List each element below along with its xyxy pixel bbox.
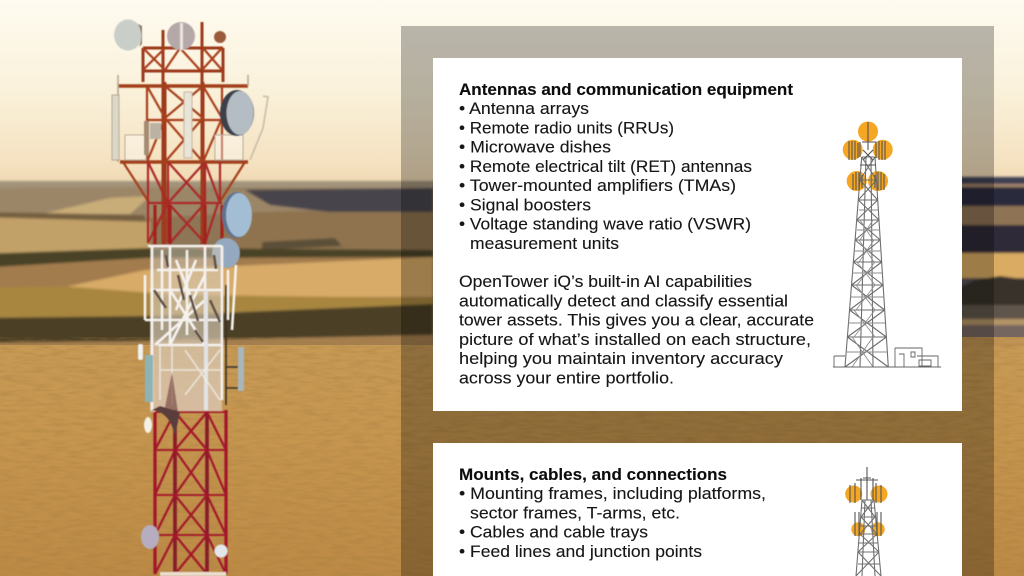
- highlight circles: [843, 122, 893, 191]
- small lower dishes: [144, 417, 152, 433]
- tower lattice: [856, 500, 881, 576]
- heading: Mounts, cables, and connections: [459, 466, 727, 484]
- sky: [0, 0, 1024, 185]
- card background: [433, 58, 962, 411]
- equipment list: • Signal boosters: [459, 196, 591, 214]
- equipment list: measurement units: [470, 235, 619, 253]
- tower top section: red lattice: [118, 22, 248, 250]
- mounts list: • Cables and cable trays: [459, 524, 648, 542]
- description paragraph: tower assets. This gives you a clear, accurate: [459, 312, 814, 330]
- upper dishes: [114, 20, 142, 50]
- description paragraph: helping you maintain inventory accuracy: [459, 350, 784, 368]
- right side horizon strips: [950, 177, 1024, 339]
- equipment list: • Microwave dishes: [459, 138, 611, 156]
- mounts card: [433, 443, 962, 576]
- vertical panel antennas: [112, 95, 119, 160]
- side antennas: [145, 355, 153, 402]
- white mid section: [150, 247, 222, 412]
- equipment list: • Remote electrical tilt (RET) antennas: [459, 158, 752, 176]
- icon: tower with highlighted antennas: [833, 122, 941, 367]
- description paragraph: across your entire portfolio.: [459, 369, 674, 387]
- highlight circles: [845, 486, 888, 536]
- description paragraph: [459, 273, 814, 387]
- icon: tower with highlighted mounts: [845, 467, 888, 576]
- antennas card: [433, 58, 962, 411]
- tower head and antennas: [850, 467, 881, 536]
- rolling hills: [0, 181, 1024, 360]
- equipment list: [459, 100, 752, 253]
- equipment list: • Voltage standing wave ratio (VSWR): [459, 216, 751, 234]
- translucent grey frame panel: [401, 26, 994, 576]
- description paragraph: picture of what’s installed on each structure,: [459, 331, 811, 349]
- equipment list: • Remote radio units (RRUs): [459, 119, 674, 137]
- tower lattice: [845, 157, 888, 367]
- wheat field: [0, 345, 1024, 576]
- equipment list: • Antenna arrays: [459, 100, 589, 118]
- field texture: [0, 340, 1024, 576]
- platform railing: [125, 135, 243, 160]
- secondary bracing: [846, 210, 887, 367]
- photo: telecom tower: [112, 20, 268, 576]
- mounts list: • Feed lines and junction points: [459, 543, 702, 561]
- equipment shed and ground line: [833, 348, 941, 367]
- lower red lattice: [155, 410, 226, 576]
- mounts list: [459, 485, 766, 561]
- tower head and antennas: [849, 122, 885, 190]
- mounts list: sector frames, T-arms, etc.: [470, 504, 680, 522]
- heading: Antennas and communication equipment: [459, 81, 794, 99]
- description paragraph: automatically detect and classify essential: [459, 292, 788, 310]
- equipment list: • Tower-mounted amplifiers (TMAs): [459, 177, 736, 195]
- mounts list: • Mounting frames, including platforms,: [459, 485, 766, 503]
- card background: [433, 443, 962, 576]
- description paragraph: OpenTower iQ’s built-in AI capabilities: [459, 273, 752, 291]
